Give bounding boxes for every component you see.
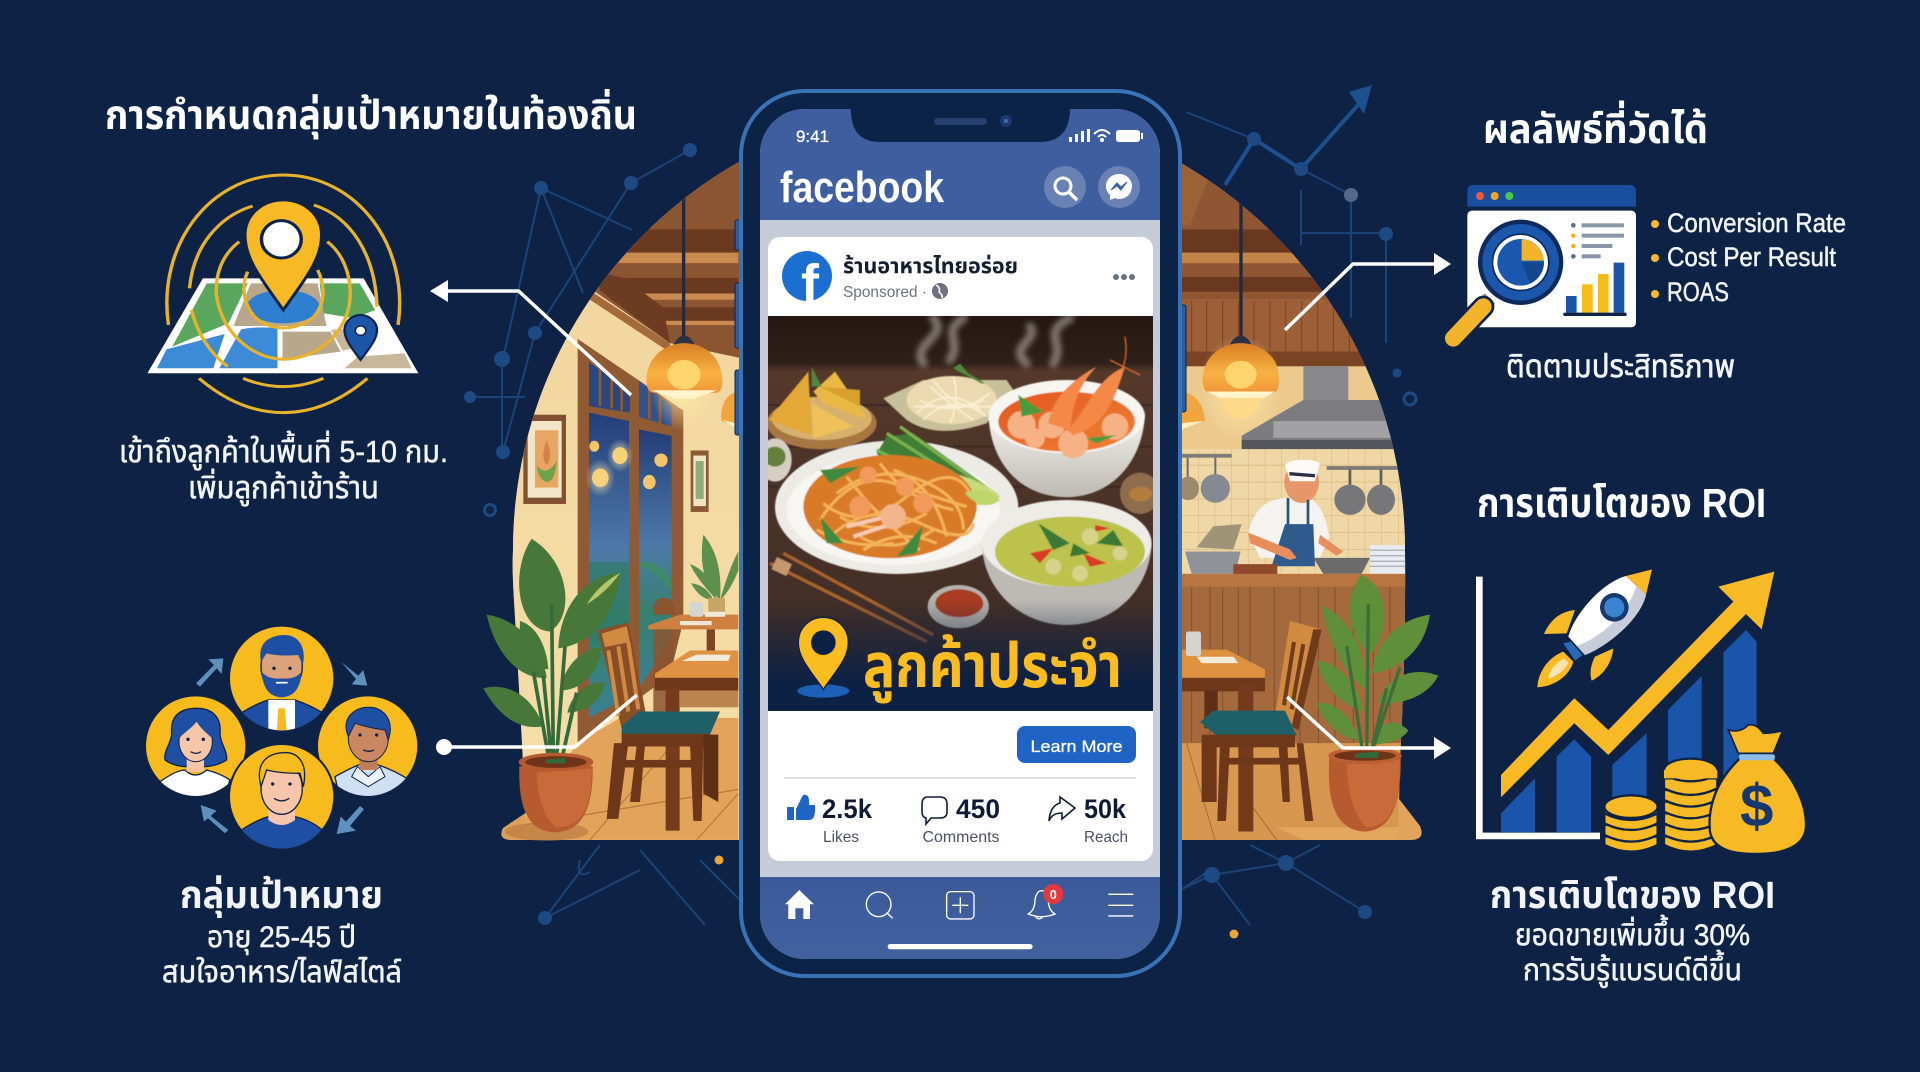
connector: ROI arrow [1287,697,1451,759]
learn more button [1017,726,1136,763]
person: man in shirt [317,695,418,800]
money bag: $ [1740,773,1773,840]
icon: menu [1108,894,1133,916]
samosa plate [768,406,878,450]
text: ROI growth summary: การเติบโตของ ROI [1490,875,1775,917]
icon: cycle arrows [196,658,367,834]
person: man in suit [229,626,334,733]
notch speaker and camera [934,115,1012,127]
icon: globe [932,283,948,299]
coin stacks [1604,759,1717,852]
bottom navigation icons [785,884,1133,949]
phone body [741,91,1180,976]
text: reach: เพิ่มลูกค้าเข้าร้าน [188,468,379,506]
chair [1275,621,1322,726]
bottom navigation bar [760,877,1160,959]
heading: ROI growth: การเติบโตของ ROI [1477,480,1766,526]
list: metrics: Cost Per Result [1667,242,1836,272]
icon: search [866,892,893,918]
counter [1182,574,1408,586]
notch [850,109,1070,142]
icon: search [1044,166,1086,208]
lime [965,490,1000,505]
heading: measurable results: ผลลัพธ์ที่วัดได้ [1483,100,1708,152]
floor [1182,743,1401,840]
window [578,339,683,743]
icon: messenger [1098,166,1140,208]
chef [1248,498,1329,558]
chart: ROI growth with rocket and money [1479,569,1806,854]
left plant and pot [483,539,621,841]
small picture [691,450,709,512]
arch interior [512,162,1406,840]
icon: notifications: 0 [1050,888,1057,902]
text: ROI growth summary: ยอดขายเพิ่มขึ้น 30% [1515,914,1750,952]
text: reach [119,430,448,506]
stat: reach: 50k [1084,794,1127,824]
food items [758,337,1160,642]
icon: facebook page logo [782,251,832,314]
phone screen [760,105,1160,959]
back table [653,598,675,615]
text: tracking caption: ติดตามประสิทธิภาพ [1506,348,1735,384]
person: young man [229,744,334,853]
text: ROI growth summary [1490,875,1775,988]
table [1182,650,1265,680]
learn more button: Learn More [1030,737,1122,756]
text: ROI growth summary: การรับรู้แบรนด์ดีขึ้น [1523,949,1742,988]
right plant and pot [1317,575,1438,832]
ad headline: ลูกค้าประจำ [863,632,1122,704]
floor base: right [1160,790,1422,840]
chair [598,622,647,728]
icon: audience circle [145,626,418,853]
bars [1501,630,1757,833]
network lines: right with growth arrow [1186,85,1416,405]
stat: likes [787,794,873,846]
text: target audience [162,875,402,989]
stat: likes: 2.5k [822,794,873,824]
restaurant scene [484,162,1438,841]
money bag [1710,725,1806,854]
floor base: left [501,790,760,840]
ad card [758,237,1160,861]
status icons [1069,129,1143,142]
stat: reach: Reach [1084,829,1128,846]
green curry bowl [982,543,1152,625]
range hood [1303,366,1348,402]
facebook wordmark: facebook [780,163,944,212]
tile wall [1182,449,1408,576]
list: metrics: ROAS [1667,277,1729,307]
small herb dish [758,438,792,482]
pad thai plate [775,441,1018,574]
signal rings [167,175,400,413]
floor [510,718,738,840]
stat: likes: Likes [823,829,859,846]
person: woman [145,695,246,800]
icon: add post [947,892,974,919]
text: target audience: สมใจอาหาร/ไลฟ์สไตล์ [162,956,402,989]
text: reach: เข้าถึงลูกค้าในพื้นที่ 5-10 กม. [119,430,448,470]
icon: notifications [1028,884,1063,919]
stat: comments: 450 [956,794,1000,824]
kitchen, right half [1182,164,1406,840]
page name: ร้านอาหารไทยอร่อย [843,255,1018,278]
rocket [1537,569,1652,687]
list: metrics [1651,208,1846,307]
stat: comments: Comments [922,829,1000,846]
wall picture [523,415,566,504]
front table [655,650,738,680]
connector: audience line [436,695,637,755]
text: target audience: อายุ 25-45 ปี [207,921,356,955]
phone side buttons [735,220,1186,435]
icon: location pin [797,617,849,698]
dining room, left half [512,162,739,840]
back plant [690,535,738,600]
trend arrow [1501,572,1774,797]
home indicator [888,944,1033,949]
stat: comments [922,794,1000,846]
stat: reach [1049,794,1128,846]
pendant lamp [1239,203,1243,336]
icon: analytics dashboard [1453,185,1636,338]
text: target audience: กลุ่มเป้าหมาย [180,875,383,918]
facebook header [760,109,1160,220]
ad photo: Thai dishes [758,316,1160,711]
second lamp [721,392,734,424]
steam [921,318,1070,363]
pendant lamp [682,198,686,336]
noodle plate [883,380,1013,431]
more menu [1113,274,1135,280]
icon: home [785,890,814,919]
second lamp [1182,392,1205,424]
sauce dish [928,585,989,628]
tom yum bowl [988,413,1145,497]
spice dish [1120,473,1160,514]
network lines: left [464,143,697,516]
pots on counter [1197,524,1242,549]
sponsored label: Sponsored · [843,284,927,301]
chopsticks [770,553,933,642]
icon: map with location pin [147,175,418,413]
hanging pans [1182,454,1232,458]
phone [735,91,1186,976]
connector: targeting arrow [430,280,631,395]
icon: facebook page logo: f [801,254,820,314]
status time: 9:41 [796,127,829,146]
list: metrics: Conversion Rate [1667,208,1846,238]
heading: local targeting: การกำหนดกลุ่มเป้าหมายในท้องถิ่น [105,88,637,140]
network lines: bottom [538,845,1372,938]
connector: measurable results arrow [1285,253,1451,330]
